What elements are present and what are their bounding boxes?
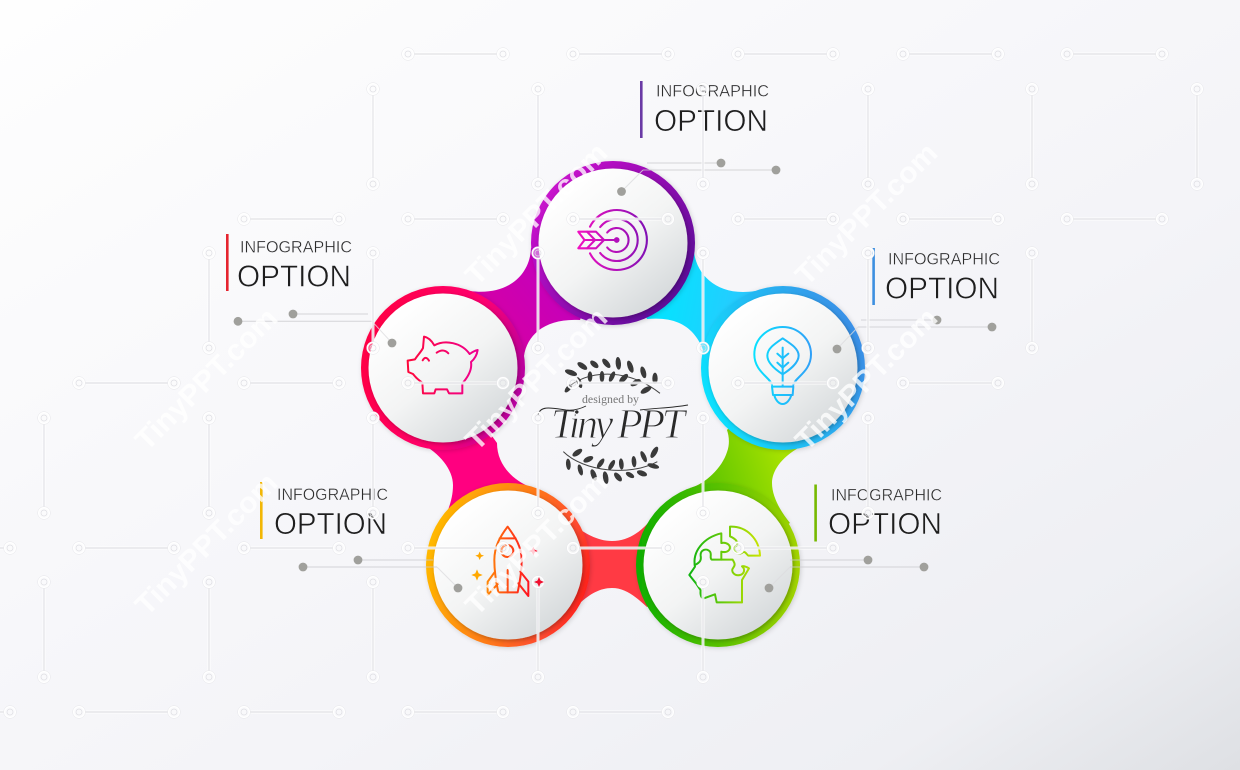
leader lines: target [617, 159, 780, 196]
watermark: TinyPPT.com repeated [129, 137, 944, 622]
leader lines: head [765, 556, 928, 592]
label: lower-right green option: INFOGRAPHIC [831, 486, 942, 504]
label: left red option: OPTION [237, 260, 351, 294]
icon: piggy bank [408, 337, 478, 393]
watermark: TinyPPT.com repeated: TinyPPT.com [129, 467, 284, 622]
ring and disc: bulb [701, 286, 865, 450]
label: lower-left yellow option: INFOGRAPHIC [277, 485, 388, 504]
ring and disc: target [531, 161, 695, 325]
watermark: TinyPPT.com repeated: TinyPPT.com [459, 467, 614, 622]
icon: rocket with stars [471, 527, 538, 596]
label: top purple option: OPTION [654, 104, 768, 138]
label: top purple option [640, 81, 769, 138]
connector: cyan between target and bulb [613, 243, 783, 368]
connector: red between rocket and head [508, 523, 718, 607]
logo: TinyPPT script text: Tiny PPT [551, 402, 688, 448]
ring and disc: rocket [426, 483, 590, 647]
icon: red star on rocket disc [534, 577, 544, 587]
logo: designed by TinyPPT [538, 357, 688, 484]
logo: upper wreath [563, 357, 660, 395]
label: lower-left yellow option: OPTION [274, 507, 387, 541]
connector: purple between target and piggy [443, 243, 613, 368]
leader lines: piggy [234, 310, 396, 347]
watermark: TinyPPT.com repeated: TinyPPT.com [789, 137, 944, 292]
icon: target with arrow [578, 210, 647, 270]
label: top purple option: INFOGRAPHIC [656, 82, 769, 100]
label: left red option: INFOGRAPHIC [240, 238, 352, 257]
label: lower-right green option: OPTION [828, 507, 942, 541]
leader lines: rocket [299, 556, 462, 592]
label: lower-left yellow option [260, 482, 388, 541]
connector: pink between piggy and rocket [420, 368, 530, 565]
label: lower-right green option [814, 484, 942, 542]
leader lines: bulb [833, 316, 996, 353]
watermark: TinyPPT.com repeated: TinyPPT.com [459, 137, 614, 292]
icon: light bulb with leaf [754, 327, 811, 404]
watermark: TinyPPT.com repeated: TinyPPT.com [459, 302, 614, 457]
label: left red option [226, 234, 352, 294]
watermark: TinyPPT.com repeated: TinyPPT.com [129, 302, 284, 457]
label: right blue option [872, 248, 1000, 305]
watermark: TinyPPT.com repeated: TinyPPT.com [789, 302, 944, 457]
label: right blue option: INFOGRAPHIC [888, 249, 1000, 268]
icon: head with puzzle pieces [689, 527, 760, 602]
label: right blue option: OPTION [885, 271, 999, 305]
logo: lower wreath [563, 446, 660, 484]
connector: green between bulb and head [690, 368, 800, 565]
ring and disc: head [636, 483, 800, 647]
logo: designed by text: designed by [582, 394, 639, 406]
ring and disc: piggy [361, 286, 525, 450]
